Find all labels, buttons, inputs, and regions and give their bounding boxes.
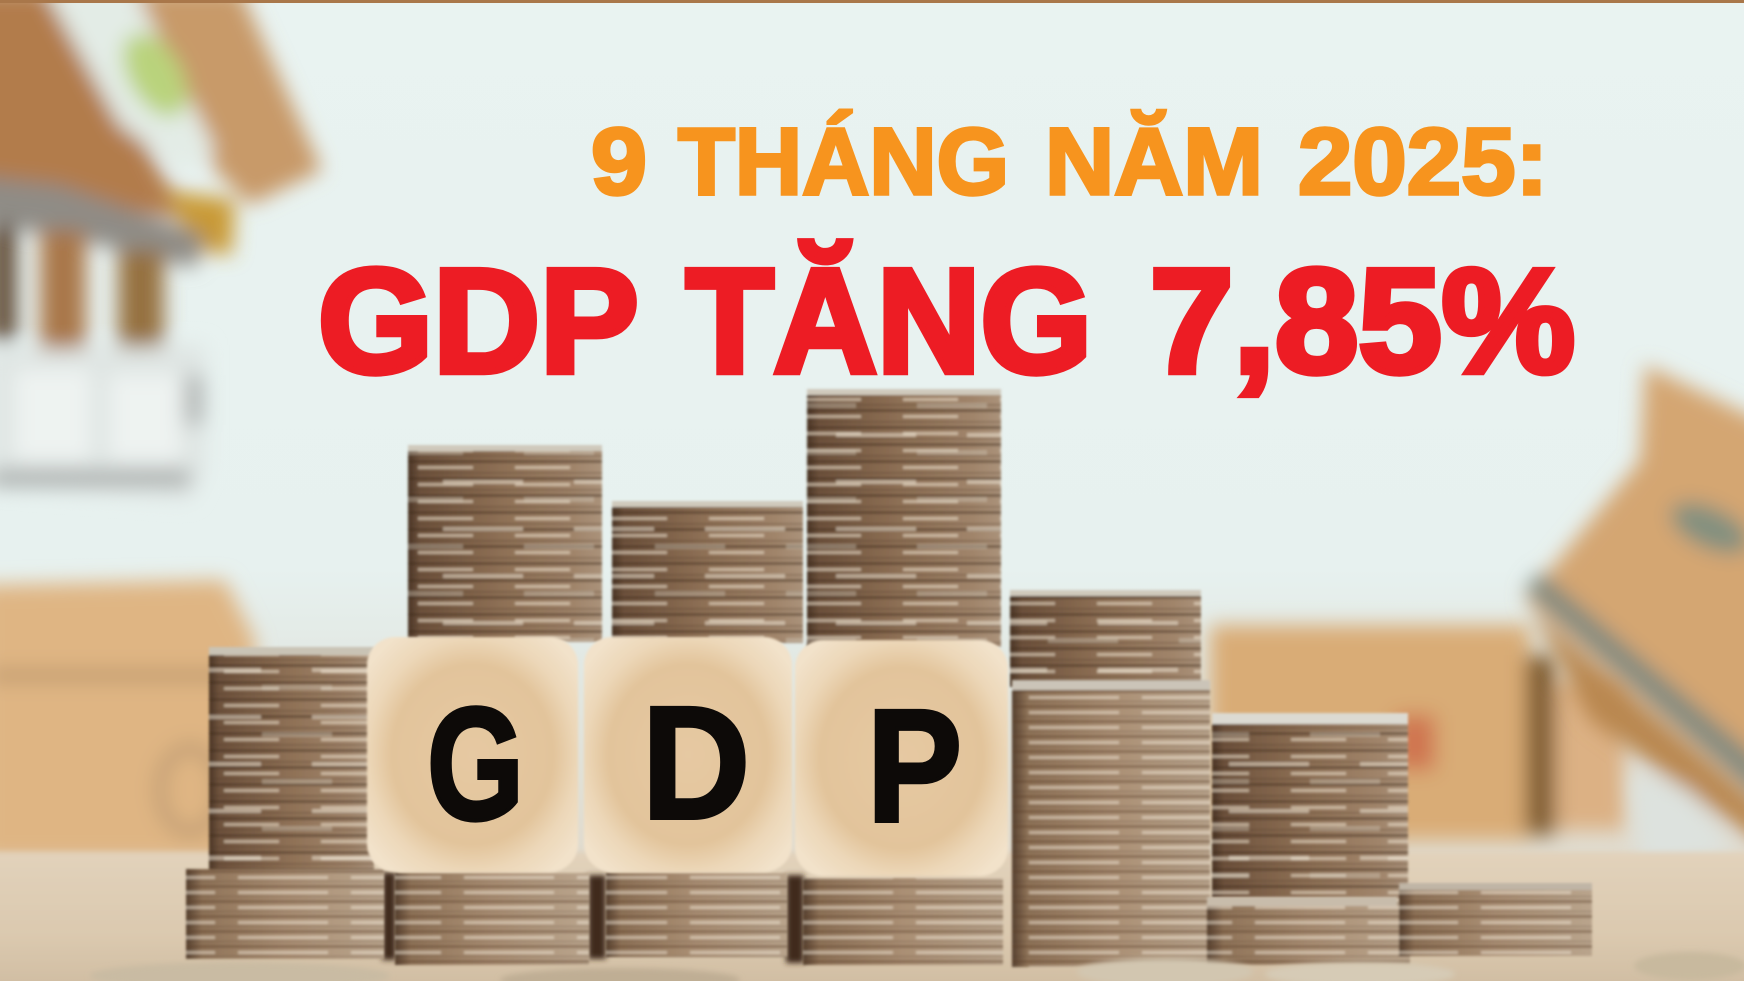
subtitle: 9 tháng năm 2025: 9: [591, 109, 647, 215]
wood block: G: [367, 637, 578, 872]
coin stack: back tallest: [807, 389, 1001, 647]
foreground coins on table: [90, 952, 1744, 981]
main title: GDP tăng 7,85%: TĂNG: [686, 239, 1092, 404]
wood block: P: [795, 640, 1008, 876]
coin stack: back left: [408, 445, 602, 642]
blurred cardboard box at lower left: [0, 580, 255, 860]
wood block: D: D: [642, 673, 750, 852]
subtitle: 9 tháng năm 2025: THÁNG: [678, 109, 1009, 215]
top border strip: [0, 0, 1744, 3]
coin stack: back centre: [612, 501, 803, 643]
wood block: P: P: [867, 676, 962, 855]
blurred tilted box at far right: [1525, 365, 1744, 875]
blurred cardboard box at right: [1210, 625, 1625, 840]
coin stack: right middle: [1212, 713, 1408, 898]
table surface: [0, 852, 1744, 981]
coin stack: left middle: [209, 647, 374, 875]
blurred toy house at top left: [0, 0, 322, 500]
coin stack: back right: [1010, 590, 1201, 687]
subtitle: 9 tháng năm 2025: 2025:: [1298, 109, 1548, 215]
coin stack: right tall: [1012, 680, 1210, 967]
shadow gaps between bottom coin stacks: [382, 872, 804, 963]
main title: GDP tăng 7,85%: GDP: [318, 239, 636, 404]
wood block: D: [584, 637, 792, 872]
subtitle: 9 tháng năm 2025: NĂM: [1045, 109, 1263, 215]
main title: GDP tăng 7,85%: 7,85%: [1150, 239, 1575, 404]
coin stacks: bottom row: [186, 869, 1592, 965]
wood block: G: G: [427, 674, 524, 853]
